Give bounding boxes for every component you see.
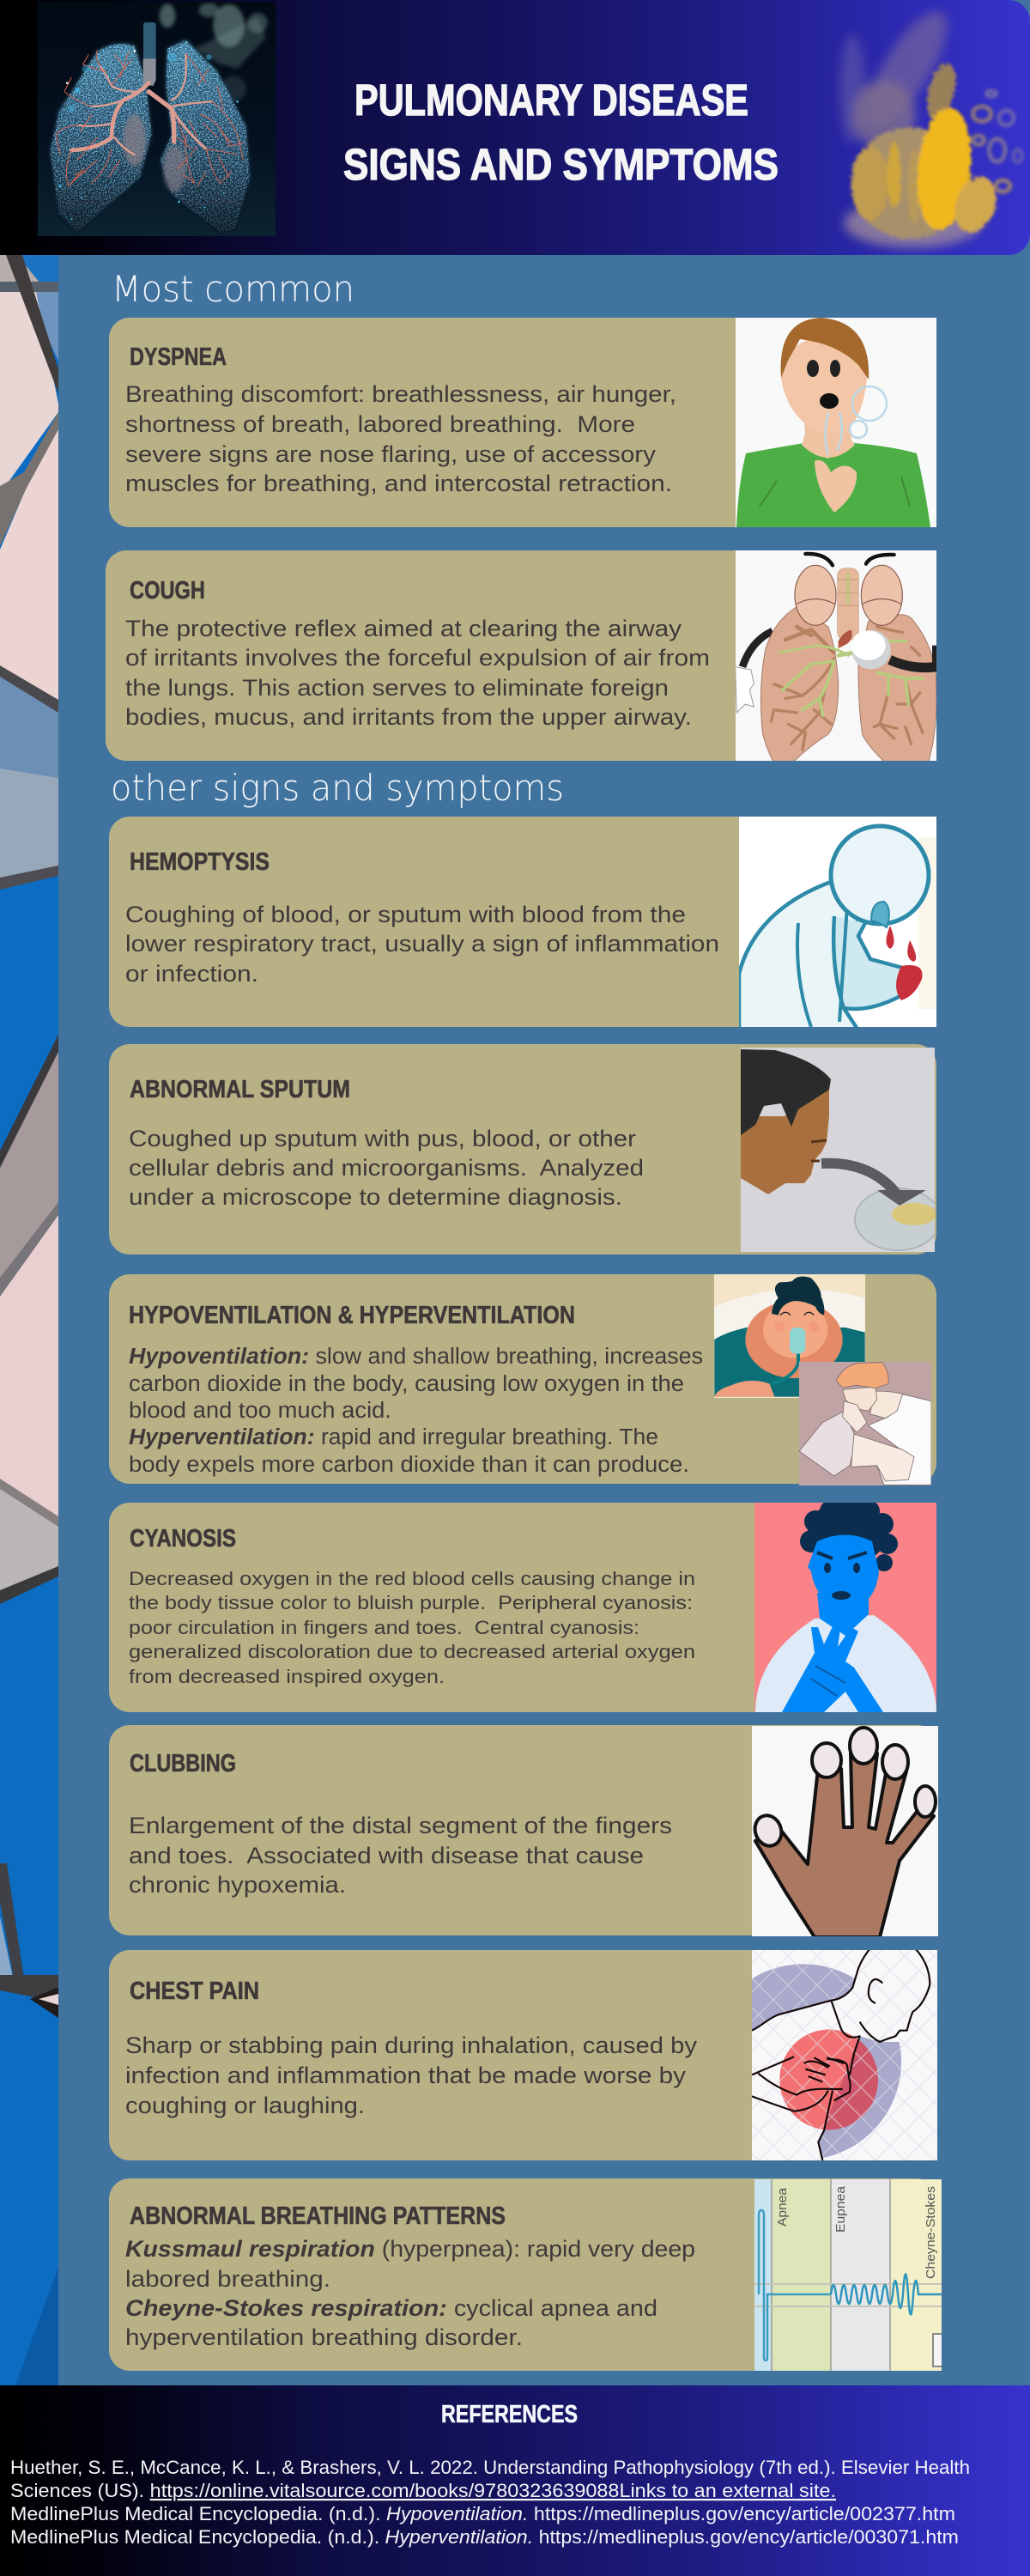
abnormal breathing patterns description: hyperventilation breathing disorder.: [125, 2324, 523, 2350]
cough description: the lungs. This action serves to eliminate foreign: [125, 675, 669, 701]
cough description: [125, 616, 710, 730]
panel: abnormal breathing patterns: [109, 2178, 945, 2371]
abnormal breathing patterns description: labored breathing.: [125, 2266, 330, 2292]
panel: cyanosis: [109, 1496, 936, 1712]
cyanosis description: [129, 1568, 695, 1687]
abnormal sputum description: Coughed up sputum with pus, blood, or other: [129, 1126, 636, 1151]
dyspnea heading: DYSPNEA: [130, 343, 227, 371]
dyspnea description: Breathing discomfort: breathlessness, air hunger,: [125, 381, 676, 407]
cyanosis heading: CYANOSIS: [130, 1525, 236, 1552]
references list: MedlinePlus Medical Encyclopedia. (n.d.). Hyperventilation. https://medlineplus.gov/ency/article/003071.htm: [10, 2526, 959, 2548]
cough heading: COUGH: [130, 577, 205, 605]
dyspnea description: severe signs are nose flaring, use of accessory: [125, 441, 657, 467]
hemoptysis description: or infection.: [125, 961, 258, 987]
icon: hand with clubbed fingers: [751, 1726, 938, 1937]
hemoptysis description: [125, 902, 719, 987]
hemoptysis heading: HEMOPTYSIS: [130, 848, 270, 876]
icon: person with blue skin: [754, 1496, 936, 1712]
cyanosis description: generalized discoloration due to decreased arterial oxygen: [129, 1641, 695, 1662]
icon: person holding chest: [752, 1950, 937, 2160]
cyanosis description: from decreased inspired oxygen.: [129, 1666, 445, 1687]
abnormal breathing patterns description: Kussmaul respiration (hyperpnea): rapid very deep: [125, 2236, 695, 2262]
header title: PULMONARY DISEASE: [354, 76, 748, 125]
dyspnea description: [125, 381, 676, 496]
icon: person on oxygen mask: [714, 1274, 865, 1398]
background strip: painted textile pattern: [0, 255, 58, 2385]
chart: breathing pattern waveform: [754, 2179, 945, 2371]
clubbing description: and toes. Associated with disease that cause: [129, 1843, 644, 1868]
hemoptysis description: Coughing of blood, or sputum with blood from the: [125, 902, 686, 927]
chest pain description: infection and inflammation that be made worse by: [125, 2063, 687, 2088]
header image: lungs: [38, 2, 276, 236]
heading: most common: Most common: [112, 268, 354, 310]
hypoventilation description: blood and too much acid.: [129, 1399, 391, 1423]
icon: person coughing blood: [739, 817, 936, 1030]
panel: hemoptysis: [109, 817, 936, 1030]
icon: coughing lungs cartoon: [736, 550, 937, 762]
abnormal sputum description: cellular debris and microorganisms. Analyzed: [129, 1155, 644, 1181]
hemoptysis description: lower respiratory tract, usually a sign of inflammation: [125, 931, 719, 957]
header image: yellow sputum smear: [839, 1, 1022, 247]
cough description: bodies, mucus, and irritants from the upper airway.: [125, 704, 692, 730]
hypoventilation description: [129, 1345, 703, 1477]
hypoventilation description: body expels more carbon dioxide than it can produce.: [129, 1453, 689, 1477]
chest pain description: coughing or laughing.: [125, 2093, 365, 2118]
panel: chest pain: [109, 1947, 947, 2162]
chart: breathing pattern waveform: Cheyne-Stokes: [924, 2186, 938, 2279]
references list: [10, 2457, 970, 2548]
references list: Sciences (US). https://online.vitalsource.com/books/9780323639088Links to an external site.: [10, 2480, 836, 2501]
header title: SIGNS AND SYMPTOMS: [343, 140, 779, 189]
smoke clouds: [160, 3, 268, 101]
cough description: The protective reflex aimed at clearing the airway: [125, 616, 682, 641]
abnormal sputum heading: ABNORMAL SPUTUM: [130, 1076, 350, 1103]
dyspnea description: muscles for breathing, and intercostal retraction.: [125, 471, 672, 496]
chest pain description: Sharp or stabbing pain during inhalation, caused by: [125, 2032, 698, 2058]
cyanosis description: Decreased oxygen in the red blood cells causing change in: [129, 1568, 695, 1589]
chart: breathing pattern waveform: Apnea: [775, 2187, 790, 2227]
references list: Huether, S. E., McCance, K. L., & Brashers, V. L. 2022. Understanding Pathophysiology (7th ed.). Elsevier Health: [10, 2457, 970, 2478]
references panel: [0, 2385, 1030, 2576]
abnormal breathing patterns description: [125, 2236, 695, 2350]
hypoventilation heading: HYPOVENTILATION & HYPERVENTILATION: [129, 1302, 575, 1329]
panel: hypoventilation and hyperventilation: [109, 1274, 936, 1485]
header title: [343, 76, 779, 189]
clubbing description: [129, 1813, 672, 1898]
abnormal sputum description: under a microscope to determine diagnosis.: [129, 1184, 622, 1210]
hypoventilation description: Hyperventilation: rapid and irregular breathing. The: [129, 1425, 658, 1449]
clubbing heading: CLUBBING: [130, 1750, 236, 1777]
heading: other signs and symptoms: other signs and symptoms: [111, 767, 564, 809]
clubbing description: chronic hypoxemia.: [129, 1872, 346, 1898]
chart: breathing pattern waveform: Eupnea: [833, 2185, 848, 2233]
panel: dyspnea: [109, 318, 936, 527]
icon: person short of breath: [736, 318, 936, 527]
hypoventilation description: carbon dioxide in the body, causing low oxygen in the: [129, 1372, 684, 1396]
panel: clubbing: [109, 1725, 938, 1937]
panel: abnormal sputum: [109, 1044, 941, 1255]
icon: man spitting into dish: [741, 1048, 941, 1252]
hypoventilation description: Hypoventilation: slow and shallow breathing, increases: [129, 1345, 703, 1369]
references list: MedlinePlus Medical Encyclopedia. (n.d.). Hypoventilation. https://medlineplus.gov/ency/article/002377.htm: [10, 2503, 955, 2524]
cough description: of irritants involves the forceful expulsion of air from: [125, 645, 710, 671]
icon: person hyperventilating into pillow: [799, 1362, 931, 1485]
abnormal breathing patterns description: Cheyne-Stokes respiration: cyclical apnea and: [125, 2295, 657, 2321]
dyspnea description: shortness of breath, labored breathing. More: [125, 411, 635, 437]
clubbing description: Enlargement of the distal segment of the fingers: [129, 1813, 672, 1838]
cyanosis description: the body tissue color to bluish purple. Peripheral cyanosis:: [129, 1592, 693, 1613]
chest pain description: [125, 2032, 698, 2118]
abnormal sputum description: [129, 1126, 644, 1210]
panel: cough: [106, 550, 937, 762]
references heading: REFERENCES: [441, 2401, 578, 2428]
cyanosis description: poor circulation in fingers and toes. Central cyanosis:: [129, 1617, 639, 1638]
abnormal breathing patterns heading: ABNORMAL BREATHING PATTERNS: [130, 2202, 506, 2230]
chest pain heading: CHEST PAIN: [130, 1978, 259, 2005]
header banner: [0, 0, 1030, 255]
